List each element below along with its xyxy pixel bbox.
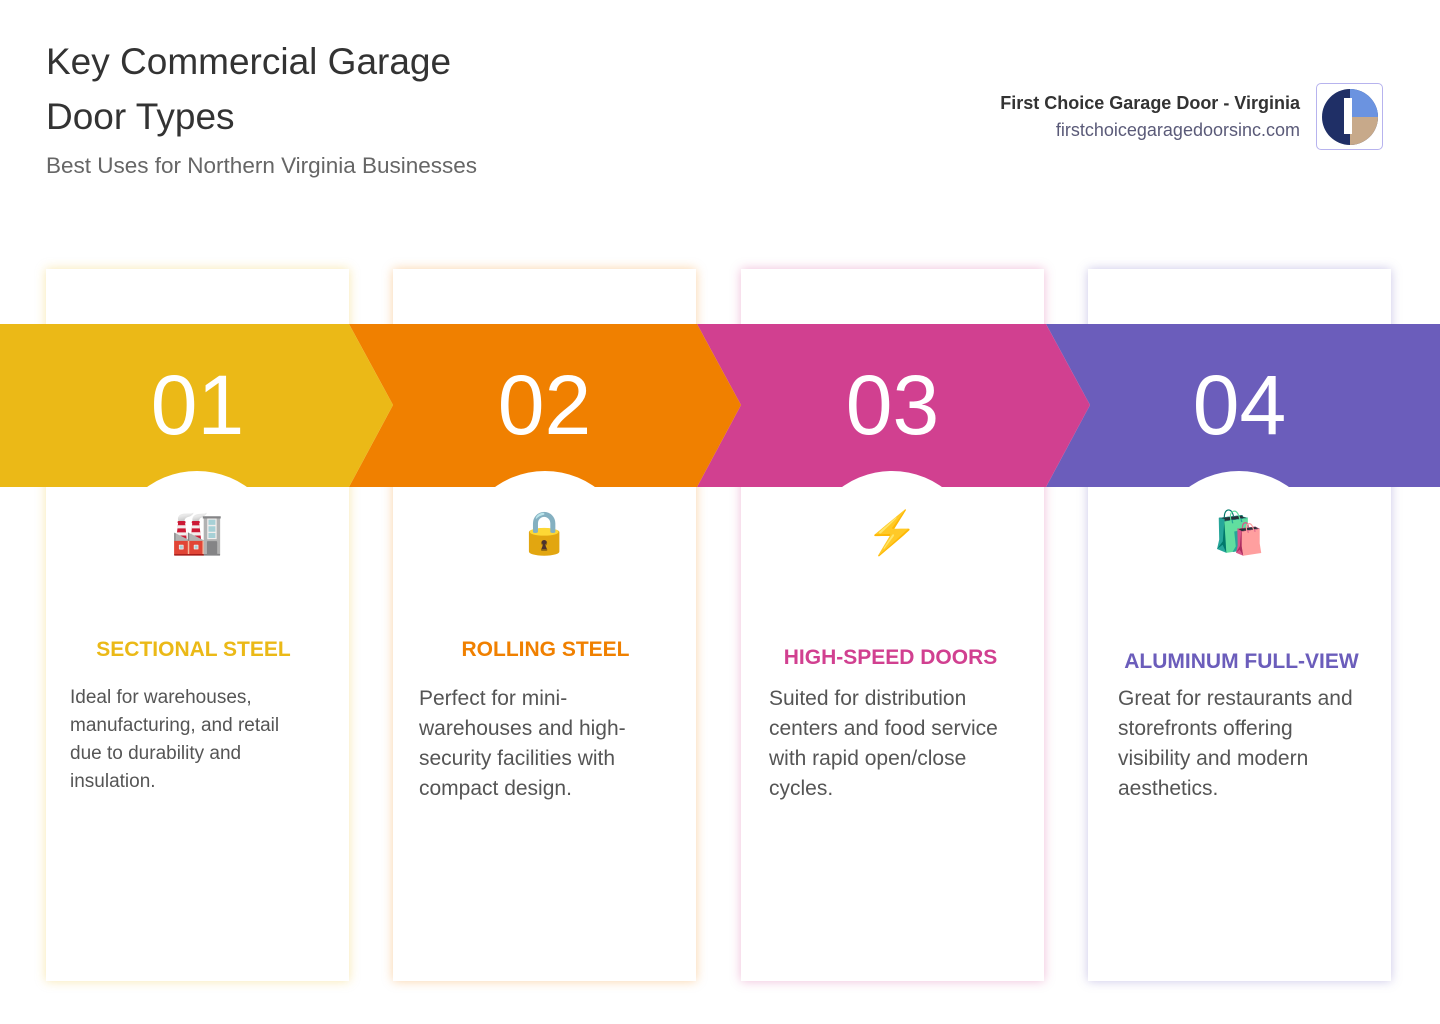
- title: Key Commercial Garage Door Types: [46, 41, 451, 137]
- icons: 🏭: [171, 509, 224, 556]
- text: Great for restaurants and storefronts offering visibility and modern aesthetics.: [1118, 687, 1353, 800]
- text: ROLLING STEEL: [462, 638, 630, 661]
- logo: [1316, 83, 1383, 150]
- white circles: [147, 471, 1289, 487]
- texts: Ideal for warehouses, manufacturing, and retail due to durability and insulation.: [70, 687, 279, 792]
- text: 🛍️: [1213, 509, 1266, 556]
- numbers: 01: [151, 358, 244, 452]
- headings: SECTIONAL STEEL: [96, 638, 291, 661]
- text: ALUMINUM FULL-VIEW: [1124, 650, 1359, 673]
- text: ⚡: [866, 509, 919, 556]
- brand text: firstchoicegaragedoorsinc.com: [1056, 120, 1300, 140]
- text: 🔒: [518, 509, 571, 556]
- text: Suited for distribution centers and food service with rapid open/close cycles.: [769, 687, 998, 800]
- brand text: [1000, 93, 1300, 140]
- card shadows/cards: [46, 269, 349, 981]
- text: 04: [1193, 358, 1286, 452]
- text: 03: [846, 358, 939, 452]
- text: 02: [498, 358, 591, 452]
- subtitle: Best Uses for Northern Virginia Businesses: [46, 153, 477, 178]
- text: HIGH-SPEED DOORS: [784, 646, 997, 669]
- text: Perfect for mini-warehouses and high-security facilities with compact design.: [419, 687, 626, 800]
- brand text: First Choice Garage Door - Virginia: [1000, 93, 1300, 113]
- arrow band: [0, 324, 1440, 487]
